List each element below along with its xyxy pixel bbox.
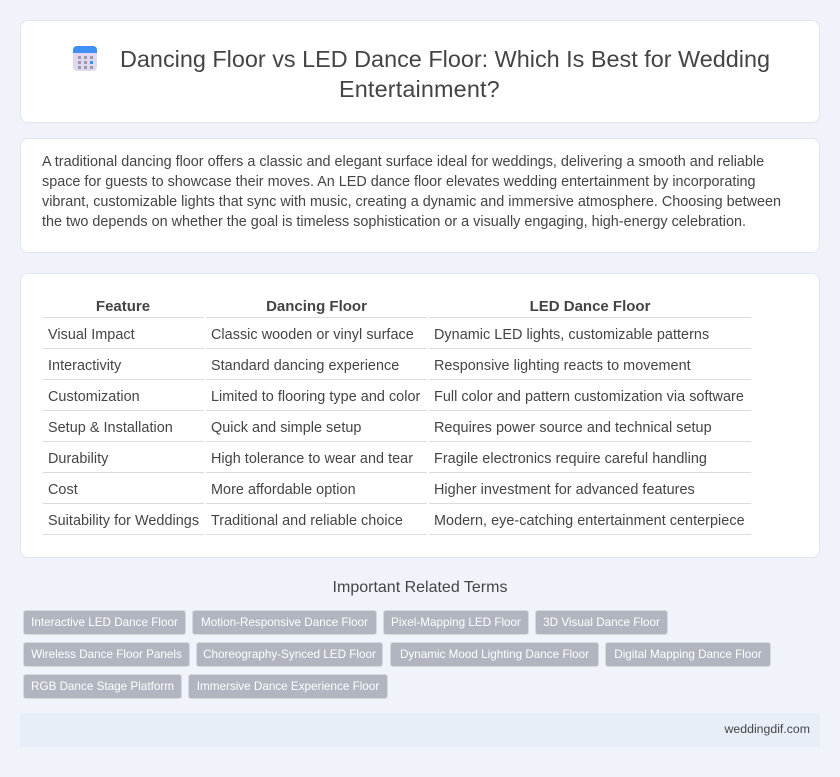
LED dance floor column: Fragile electronics require careful handling	[434, 451, 707, 467]
footer credit: weddingdif.com	[725, 722, 810, 736]
dancing floor column	[211, 327, 420, 529]
related terms tags: Interactive LED Dance Floor	[31, 616, 178, 629]
dancing floor column: Traditional and reliable choice	[211, 513, 403, 529]
intro text: the two depends on whether the goal is timeless sophistication or a visually engaging, high-energy celebration.	[42, 214, 746, 230]
related terms tags: Motion-Responsive Dance Floor	[201, 616, 368, 629]
row labels: Interactivity	[48, 358, 121, 374]
row labels: Suitability for Weddings	[48, 513, 199, 529]
related terms tags: Digital Mapping Dance Floor	[614, 648, 762, 661]
dancing floor column: Standard dancing experience	[211, 358, 399, 374]
related terms tags: Pixel-Mapping LED Floor	[391, 616, 521, 629]
footer bar	[20, 713, 820, 747]
intro panel	[20, 138, 820, 253]
related terms tags	[23, 610, 771, 699]
row labels: Cost	[48, 482, 78, 498]
LED dance floor column: Higher investment for advanced features	[434, 482, 695, 498]
related terms tags: 3D Visual Dance Floor	[543, 616, 660, 629]
intro text: A traditional dancing floor offers a classic and elegant surface ideal for weddings, delivering a smooth and reliable	[42, 154, 764, 170]
related terms tags: RGB Dance Stage Platform	[31, 680, 174, 693]
LED dance floor column: Requires power source and technical setup	[434, 420, 712, 436]
intro text: vibrant, customizable lights that sync with music, creating a dynamic and immersive atmosphere. Choosing between	[42, 194, 781, 210]
header: dancing floor: Dancing Floor	[266, 298, 367, 315]
LED dance floor column: Dynamic LED lights, customizable patterns	[434, 327, 709, 343]
icon: calendar	[73, 46, 97, 71]
LED dance floor column	[434, 327, 745, 529]
row labels: Setup & Installation	[48, 420, 173, 436]
related terms tags: Dynamic Mood Lighting Dance Floor	[400, 648, 589, 661]
row labels: Customization	[48, 389, 140, 405]
title: Entertainment?	[339, 76, 500, 102]
dancing floor column: Classic wooden or vinyl surface	[211, 327, 414, 343]
dancing floor column: Quick and simple setup	[211, 420, 361, 436]
dancing floor column: High tolerance to wear and tear	[211, 451, 413, 467]
related terms heading: Important Related Terms	[333, 579, 507, 596]
comparison table	[43, 298, 751, 535]
title: Dancing Floor vs LED Dance Floor: Which Is Best for Wedding	[120, 46, 770, 72]
dancing floor column: More affordable option	[211, 482, 356, 498]
title	[120, 46, 770, 102]
related terms tags: Wireless Dance Floor Panels	[31, 648, 182, 661]
row labels	[48, 327, 199, 529]
header: LED dance floor: LED Dance Floor	[530, 298, 650, 315]
LED dance floor column: Full color and pattern customization via software	[434, 389, 744, 405]
row labels: Visual Impact	[48, 327, 135, 343]
intro text: space for guests to showcase their moves. An LED dance floor elevates wedding entertainment by incorporating	[42, 174, 756, 190]
dancing floor column: Limited to flooring type and color	[211, 389, 420, 405]
related terms tags: Choreography-Synced LED Floor	[203, 648, 376, 661]
LED dance floor column: Modern, eye-catching entertainment centerpiece	[434, 513, 745, 529]
comparison table panel	[20, 273, 820, 558]
header: feature: Feature	[96, 298, 150, 315]
intro text	[42, 154, 781, 230]
related terms tags: Immersive Dance Experience Floor	[197, 680, 379, 693]
LED dance floor column: Responsive lighting reacts to movement	[434, 358, 691, 374]
row labels: Durability	[48, 451, 108, 467]
header panel	[20, 20, 820, 123]
